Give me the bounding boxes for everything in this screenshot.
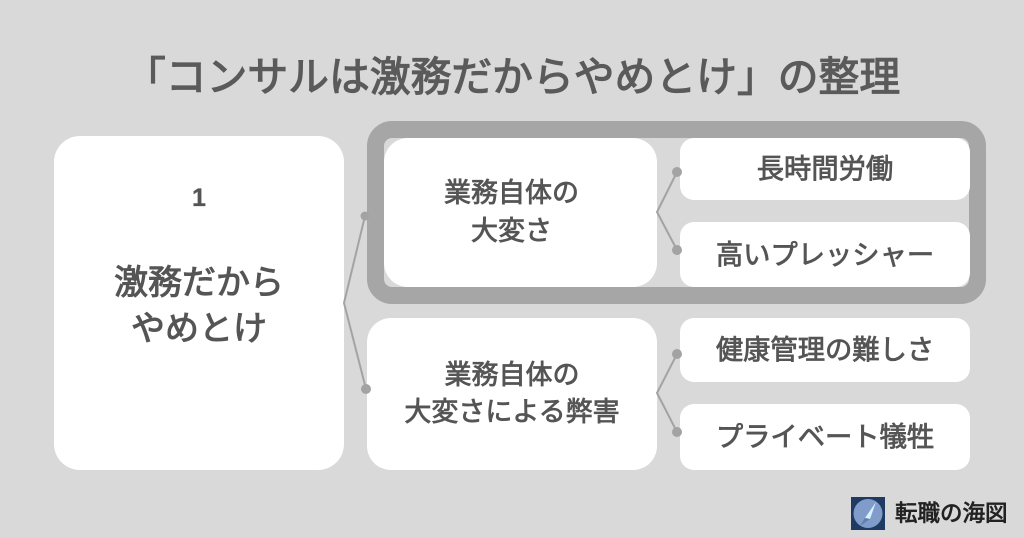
- number: 1: [192, 184, 206, 212]
- title: 「コンサルは激務だからやめとけ」の整理: [125, 54, 900, 100]
- logo icon: compass: [851, 497, 885, 530]
- panel: health management: [680, 318, 970, 382]
- highlight frame: [367, 121, 986, 304]
- panel: high pressure: [680, 222, 970, 287]
- main reason text: [114, 264, 284, 348]
- panel: long working hours: 長時間労働: [757, 153, 893, 184]
- main reason text: やめとけ: [131, 310, 267, 348]
- panel: harms from workload: 大変さによる弊害: [404, 397, 620, 427]
- panel: health management: 健康管理の難しさ: [716, 334, 934, 365]
- panel: workload itself: [384, 138, 657, 287]
- panel: workload itself: 大変さ: [471, 216, 552, 246]
- main reason text: 激務だから: [114, 264, 284, 302]
- panel: harms from workload: [367, 318, 657, 470]
- panel: long working hours: [680, 138, 970, 200]
- panel: high pressure: 高いプレッシャー: [716, 238, 934, 270]
- panel: main reason: [54, 136, 344, 470]
- panel: workload itself: 業務自体の: [444, 178, 579, 208]
- panel: private sacrifice: [680, 404, 970, 470]
- logo text: 転職の海図: [895, 501, 1008, 526]
- panel: harms from workload: 業務自体の: [444, 360, 579, 390]
- panel: private sacrifice: プライベート犠牲: [716, 421, 934, 452]
